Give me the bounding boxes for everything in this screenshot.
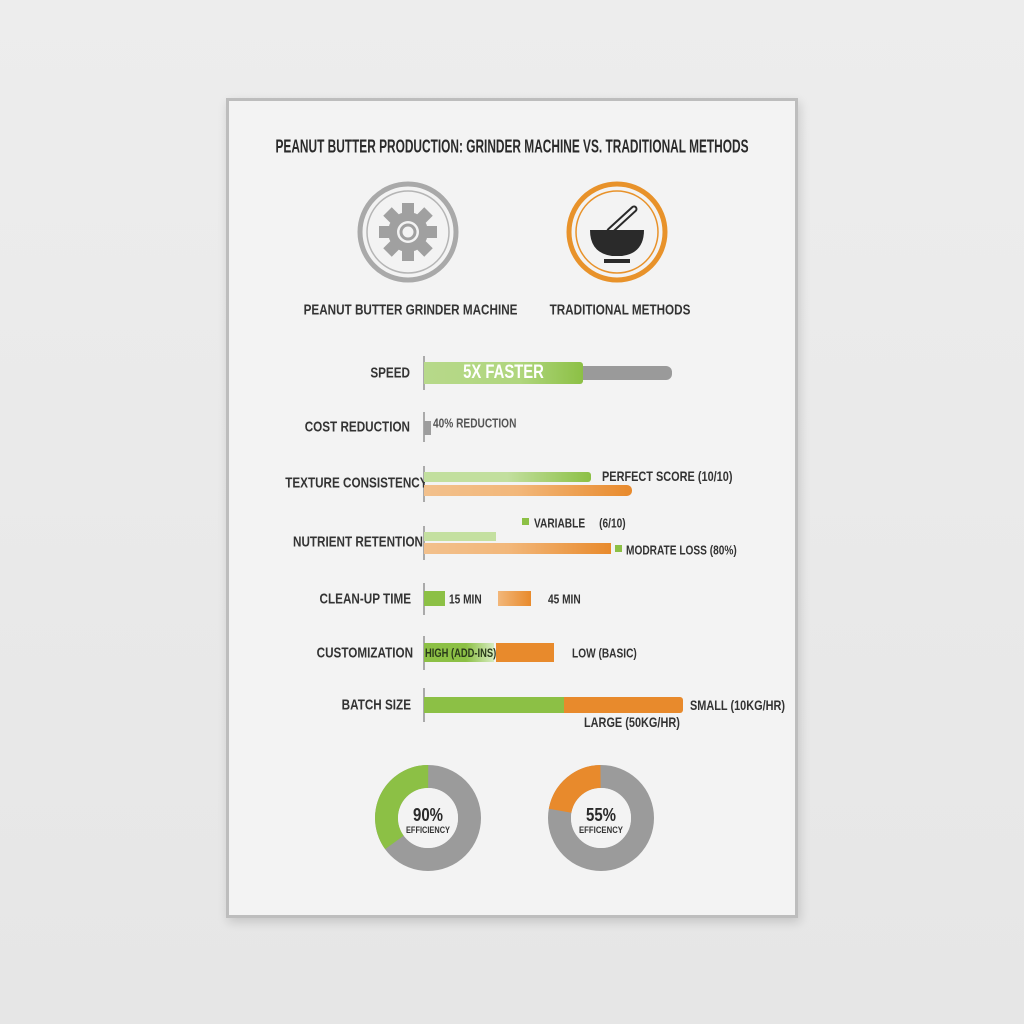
row: customization xyxy=(317,636,637,670)
donut: machine efficiency: 90% xyxy=(413,805,443,825)
donut: traditional efficiency xyxy=(548,765,654,871)
row: speed xyxy=(370,356,672,390)
icon: mortar and pestle xyxy=(566,182,668,282)
row: customization: CUSTOMIZATION xyxy=(317,644,413,662)
row: batch size: LARGE (50KG/HR) xyxy=(584,714,680,730)
row: nutrient retention: VARIABLE (6/10) xyxy=(534,516,626,530)
row: texture consistency xyxy=(285,466,732,502)
row: batch size xyxy=(342,688,785,730)
row: texture consistency: TEXTURE CONSISTENCY xyxy=(285,474,428,492)
donut: traditional efficiency: 55% xyxy=(586,805,616,825)
row: nutrient retention: MODRATE LOSS (80%) xyxy=(626,542,737,558)
row: clean-up time: 45 MIN xyxy=(548,592,581,606)
row: batch size: BATCH SIZE xyxy=(342,696,411,714)
row: batch size: SMALL (10KG/HR) xyxy=(690,697,785,713)
row: texture consistency: PERFECT SCORE (10/10) xyxy=(602,468,732,484)
row: customization: LOW (BASIC) xyxy=(572,646,637,660)
label: machine: PEANUT BUTTER GRINDER MACHINE xyxy=(304,302,517,318)
label: traditional: TRADITIONAL METHODS xyxy=(550,302,690,318)
row: speed: SPEED xyxy=(370,364,410,382)
row: clean-up time: 15 MIN xyxy=(449,592,482,606)
title: PEANUT BUTTER PRODUCTION: GRINDER MACHINE VS. TRADITIONAL METHODS xyxy=(275,136,748,156)
row: clean-up time: CLEAN-UP TIME xyxy=(320,590,411,608)
donut: machine efficiency xyxy=(375,765,481,871)
donut: machine efficiency: EFFICIENCY xyxy=(406,825,450,835)
frame xyxy=(226,98,798,918)
row: speed: 5X FASTER xyxy=(463,362,544,383)
row: nutrient retention: NUTRIENT RETENTION xyxy=(293,534,423,550)
donut: traditional efficiency: EFFICENCY xyxy=(579,825,623,835)
row: nutrient retention xyxy=(293,516,737,560)
row: clean-up time xyxy=(320,583,581,615)
icon: gear xyxy=(358,182,458,282)
row: cost reduction xyxy=(305,412,516,442)
row: cost reduction: COST REDUCTION xyxy=(305,418,410,436)
row: customization: HIGH (ADD-INS) xyxy=(425,646,496,660)
row: cost reduction: 40% REDUCTION xyxy=(433,416,516,430)
